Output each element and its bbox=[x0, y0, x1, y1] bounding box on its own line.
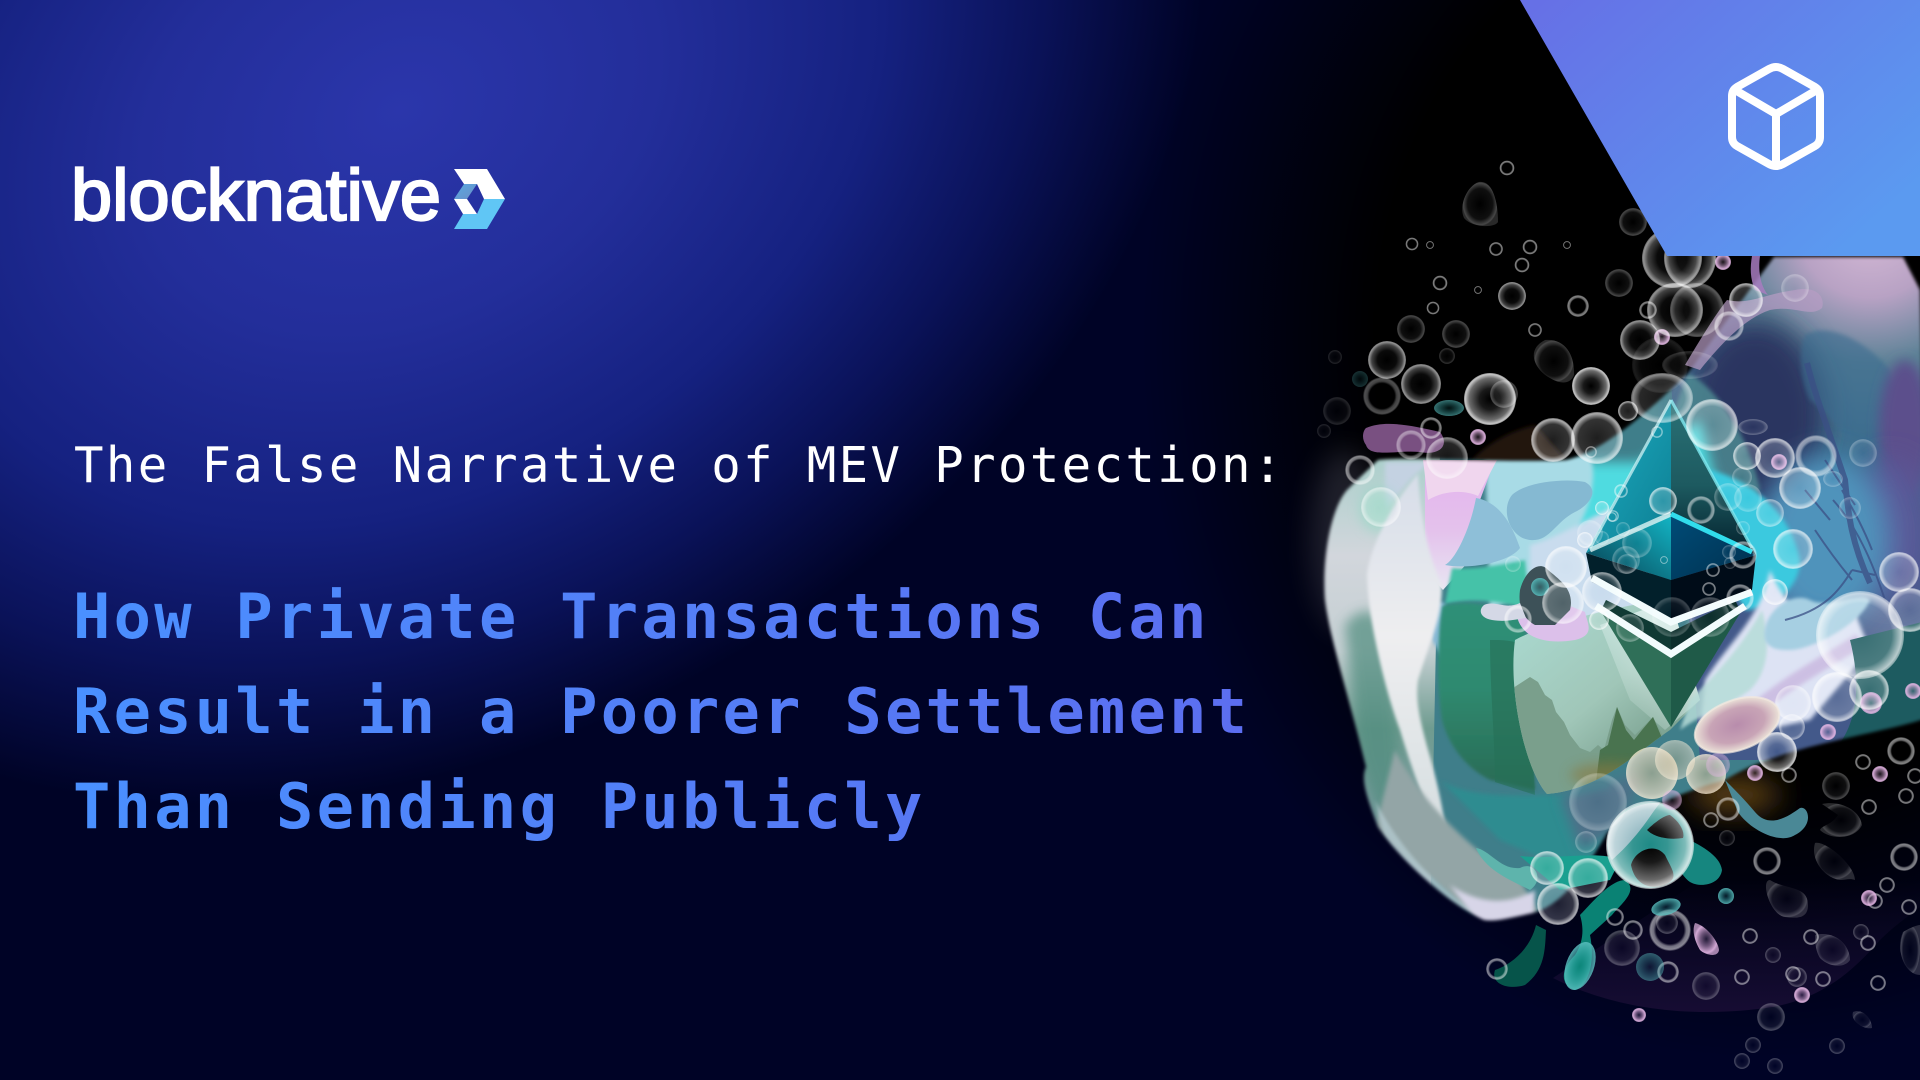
illustration: Ethereum bubble bbox=[1300, 160, 1920, 1074]
logo: blocknative bbox=[71, 156, 505, 236]
lower left grey band bbox=[1375, 750, 1540, 925]
dark haze under bubble bbox=[1553, 860, 1920, 1012]
chevron two bbox=[1596, 606, 1745, 654]
lavender bowl bbox=[1516, 590, 1589, 641]
pale lavender pool bbox=[1527, 506, 1652, 634]
chevron one bbox=[1592, 578, 1752, 622]
blue-teal band bbox=[1445, 498, 1520, 566]
pale blue band bbox=[1485, 456, 1593, 610]
teal-green grey shade bbox=[1345, 611, 1400, 840]
soft edge glow bbox=[1311, 450, 1379, 630]
lower teal gradient bbox=[1446, 785, 1600, 857]
headline: How Private Transactions Can bbox=[73, 580, 1210, 653]
left grey band bbox=[1322, 456, 1440, 884]
small dark bubbles bbox=[1317, 208, 1869, 1074]
lavender edge bbox=[1450, 885, 1535, 925]
pink egg bubble bbox=[1687, 686, 1787, 764]
diamond left bbox=[1586, 514, 1671, 580]
white band bbox=[1366, 475, 1446, 822]
teal shelf lower right bbox=[1842, 622, 1920, 740]
dark purple zone bbox=[1685, 320, 1825, 510]
ethereum logo bbox=[1586, 400, 1756, 727]
left mint patch bbox=[1360, 488, 1396, 532]
right lower purple bbox=[1866, 461, 1920, 600]
brown glow behind bubble bbox=[1470, 425, 1566, 462]
bottom facet right bbox=[1671, 610, 1742, 727]
lower glass bubbles bbox=[1530, 773, 1640, 966]
upper lavender splash bbox=[1685, 289, 1823, 370]
forest silhouette bbox=[1514, 677, 1662, 794]
tree trunks bbox=[1785, 363, 1885, 620]
headline: Result in a Poorer Settlement bbox=[73, 675, 1250, 748]
upper right sheen bbox=[1660, 240, 1920, 760]
pale blue sliver bbox=[1432, 601, 1446, 653]
purple stalk bbox=[1751, 256, 1768, 295]
blue swirl bbox=[1800, 328, 1889, 418]
glass bubbles over body bbox=[1345, 373, 1920, 740]
dark blob centre left bbox=[1520, 566, 1571, 625]
subtitle: The False Narrative of MEV Protection: bbox=[74, 437, 1285, 494]
diamond right bbox=[1671, 514, 1756, 580]
amber glow bbox=[1690, 777, 1780, 813]
teal blue blob bbox=[1507, 481, 1592, 540]
corner panel bbox=[1520, 0, 1920, 256]
right purple band bbox=[1879, 360, 1920, 500]
bottom facet left bbox=[1600, 610, 1671, 727]
small ring bubbles bbox=[1406, 160, 1920, 991]
pale egg bbox=[1513, 605, 1700, 794]
right cyan wash bbox=[1711, 469, 1802, 613]
upper left face bbox=[1586, 400, 1671, 553]
mint green patch bbox=[1445, 560, 1530, 610]
cyan wash bbox=[1578, 417, 1720, 526]
drop splash lavender bbox=[1481, 603, 1526, 621]
dark band bbox=[1600, 600, 1671, 655]
large bubble with teal core bbox=[1606, 801, 1694, 889]
teal splash middle bbox=[1668, 835, 1722, 885]
teal splash lower bbox=[1725, 780, 1808, 838]
icon: cube bbox=[1732, 67, 1820, 166]
outline edges bbox=[1590, 400, 1671, 548]
lower pale blue streak bbox=[1375, 802, 1470, 912]
logo wordmark: blocknative bbox=[71, 156, 441, 236]
peach bubbles bbox=[1626, 740, 1730, 810]
upper right face bbox=[1671, 400, 1756, 555]
pink wash top bbox=[1423, 460, 1497, 500]
upper teal swirl bbox=[1675, 373, 1762, 494]
lavender arc bbox=[1755, 640, 1860, 710]
headline: Than Sending Publicly bbox=[73, 770, 926, 843]
green drips bbox=[1476, 848, 1630, 990]
lower blue shade bbox=[1560, 780, 1634, 850]
bubble base bbox=[1431, 386, 1774, 916]
light blue pool bbox=[1764, 597, 1870, 650]
headline bbox=[73, 580, 1250, 843]
large glossy bubbles bbox=[1363, 228, 1809, 772]
bubble body bbox=[1300, 240, 1920, 940]
dark teardrops bbox=[1462, 182, 1920, 1028]
right pale glass bbox=[1680, 610, 1767, 730]
lower facet right bbox=[1671, 555, 1756, 623]
pink band bbox=[1425, 472, 1490, 590]
pink and teal bubbles bbox=[1470, 254, 1920, 1022]
forest blue zone bbox=[1760, 455, 1890, 625]
left pale lavender bbox=[1384, 461, 1424, 500]
pink drop left bbox=[1363, 424, 1444, 453]
dark forest shade bbox=[1490, 640, 1535, 795]
dark green band bbox=[1438, 603, 1535, 790]
pale lavender right zone bbox=[1700, 570, 1870, 735]
logo mark bbox=[454, 169, 505, 229]
lower facet left bbox=[1586, 553, 1671, 623]
